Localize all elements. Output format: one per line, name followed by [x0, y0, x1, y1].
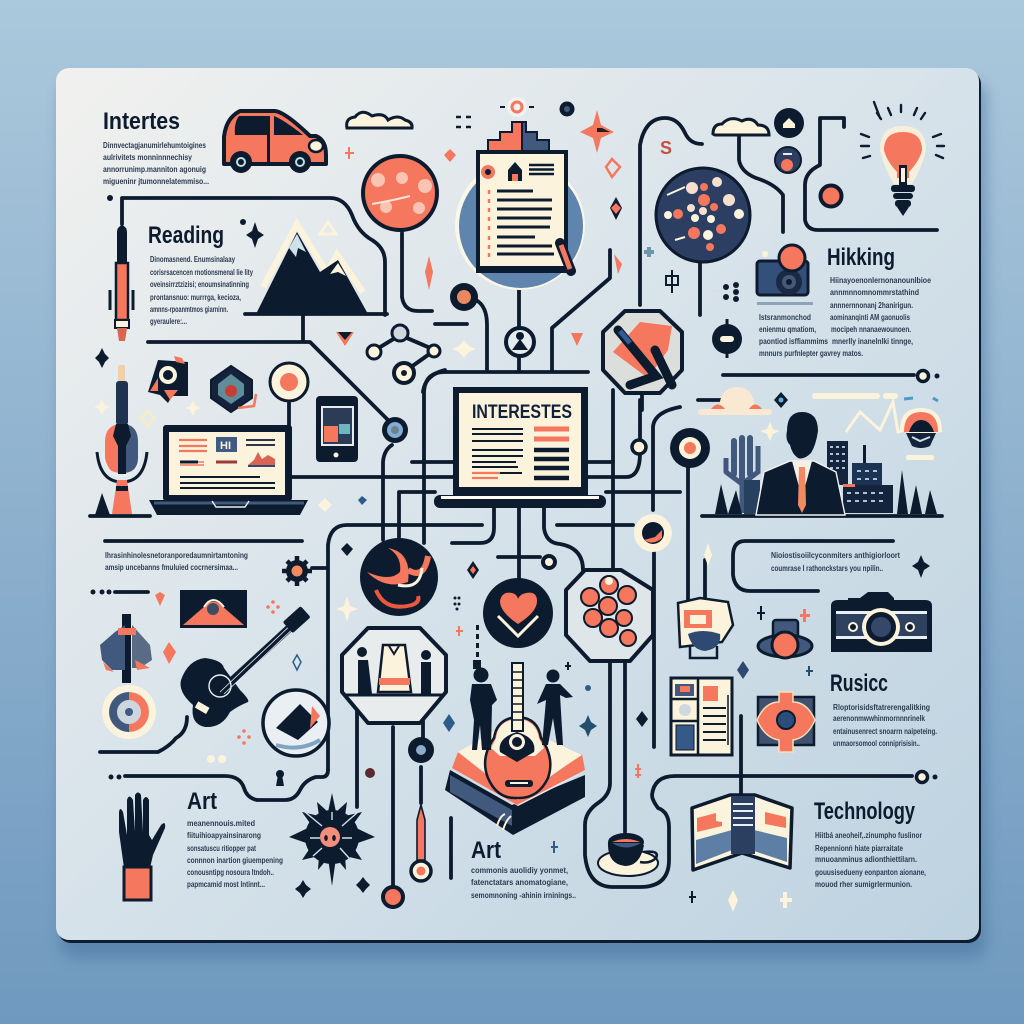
icon: open book stack [445, 722, 585, 835]
text block: Rusicc body: unmaorsomool conniprisisin.. [833, 738, 920, 748]
icon: ring node right upper [918, 370, 940, 382]
text block: Hikking body: Istsranmonchod [759, 312, 811, 322]
icon: magazine page [671, 678, 732, 755]
text block: mid right: Nioiostisoiilcyconmiters anthigiorloort [771, 550, 900, 560]
text block: Art left body: papmcamid most lntinnt... [187, 879, 265, 889]
heading: Art left: Art [187, 788, 217, 815]
icon: swirl circle [360, 538, 438, 616]
icon: car [224, 111, 326, 173]
icon: document tower [455, 122, 585, 290]
icon: tablet [316, 396, 358, 462]
text block: Technology body: Repennionń hiate piarraitate [815, 843, 903, 853]
text block: Reading body: gyeraulere:... [150, 316, 187, 326]
icon: camera small top [757, 245, 813, 305]
icon: small orb badge [634, 514, 672, 552]
icon: red face badge [900, 398, 942, 448]
icon: coral gem [336, 332, 354, 346]
icon: flower node [282, 556, 312, 586]
icon: ring node [450, 283, 478, 311]
icon: cream spike [704, 543, 712, 566]
connector lines [90, 118, 942, 888]
icon: ring small [632, 440, 646, 454]
icon: coral circle [363, 156, 437, 230]
icon: cloud left [347, 112, 412, 128]
icon: pen [110, 225, 133, 341]
icon: fruit plate [566, 570, 653, 661]
icon: spiky burst [289, 793, 375, 886]
text block: Art centre body: commonis auolidiy yonmet, [471, 865, 568, 875]
text block: Art centre body [471, 865, 576, 900]
icon: music note ball [820, 186, 842, 206]
icon: left laptop: HI [220, 440, 231, 452]
text block: Art left body: fiituihioapyainsinarong [187, 830, 261, 840]
text block: mid left [105, 550, 248, 572]
icon: small dial [775, 147, 801, 173]
icon: scene octagon [342, 628, 446, 723]
text block: Reading body: oveinsirrztzizisi; enoumsinatinning [150, 279, 249, 289]
icon: businessman [756, 412, 845, 515]
text block: Reading body: amnns-rpoanmtmos giarninn. [150, 304, 228, 314]
text block: Rusicc body: aerenonmwwhinmornnnrinelk [833, 713, 925, 723]
text block: mid right: coumrase I rathonckstars you npilin.. [771, 563, 883, 573]
panel shadow [60, 82, 986, 958]
icon: dotted pin [473, 625, 481, 669]
text block: Technology body: Hiitbá aneoheif,.zinumpho fuslinor [815, 830, 922, 840]
heading: Reading: Reading [148, 222, 224, 249]
icon: photo lens circle [263, 690, 329, 756]
icon: open hand [726, 438, 758, 513]
text block: Technology body: gouusisedueny eonpanton aionane, [815, 867, 926, 877]
text block: Intertes body: Dinnvectagjanumirlehumtoigines [103, 140, 206, 150]
icon: dark target [670, 428, 710, 468]
text block: Intertes body [103, 140, 209, 186]
text block: Technology body: mouod rher sumigrlermunion. [815, 879, 912, 889]
text block: Technology body [815, 830, 926, 889]
icon: ring beside heart [543, 556, 555, 568]
icon: cloud right [713, 119, 769, 135]
icon: home dot [774, 108, 804, 138]
icon: sunrise [698, 387, 772, 415]
text block: Hikking body [759, 275, 931, 358]
icon: cream bars [812, 393, 934, 460]
icon: pencil [417, 805, 425, 860]
heading: Rusicc: Rusicc [830, 670, 888, 697]
icon: light bulb [861, 102, 944, 216]
text block: Intertes body: aulrivitets monninnnechisy [103, 152, 192, 162]
text block: Hikking body: enienmu qmatiom, [759, 324, 816, 334]
icon: left laptop [149, 425, 308, 515]
icon: donut chart [102, 685, 156, 739]
icon: coral S: S [660, 138, 672, 158]
icon: microphone [95, 365, 147, 515]
heading: Art centre: Art [471, 837, 501, 864]
icon: orb tile [758, 620, 812, 658]
text block: Hikking body: Hiinayoenonlernonanounlbioe [830, 275, 931, 285]
small sparkles and dots [95, 117, 930, 903]
icon: dark blob circle [656, 168, 750, 262]
text block: mid left: Ihrasinhinolesnetoranporedaumnirtamtoning [105, 550, 248, 560]
icon: camera tile left [148, 356, 188, 403]
icon: square cross glyph [666, 270, 678, 293]
text block: Hikking body: mnerlly inanelnlki tinnge, [832, 336, 913, 346]
text block: Intertes body: annorrunimp.manniton agonuig [103, 164, 206, 174]
icon: mountain outline right [846, 402, 905, 432]
heading: Hikking: Hikking [827, 244, 895, 271]
coral accents [155, 110, 810, 778]
text block: Rusicc body: entainusenrect snoarrn naipeteing. [833, 726, 937, 736]
icon: small dots row [90, 590, 112, 594]
heading: Technology: Technology [814, 798, 915, 825]
icon: city buildings [715, 441, 937, 514]
icon: person ring [506, 328, 534, 356]
laptop title: INTERESTES [472, 402, 572, 423]
icon: node circle [382, 417, 408, 443]
heading: Intertes: Intertes [103, 108, 180, 135]
text block: Hikking body: annnernnonanj 2hanirigun. [830, 300, 913, 310]
icon: shield mask [678, 598, 733, 658]
icon: camera large [831, 592, 932, 652]
icon: gear tile [757, 692, 815, 752]
icon: small slate plus [644, 247, 654, 257]
text block: Technology body: mnuoanminus adionthiettilarn. [815, 854, 917, 864]
icon: top coral ring [500, 97, 534, 117]
icon: dash glyph [711, 282, 739, 302]
icon: figure left [470, 668, 497, 750]
text block: Reading body [150, 254, 253, 326]
text block: Art left body [187, 818, 283, 889]
icon: top dark dot [560, 102, 574, 116]
icon: ring coral bottom [383, 887, 403, 907]
text block: Art centre body: fatenctatars anomatogiane, [471, 877, 568, 887]
icon: node cluster [367, 325, 440, 383]
text block: Hikking body: aominanqinti AM gaonuolis [830, 312, 910, 322]
text block: Reading body: prontansnuo: murrrga, kecioza, [150, 292, 241, 302]
icon: blue diamond [774, 392, 788, 408]
text block: Reading body: Dinomasnend. Enumsinalaay [150, 254, 235, 264]
text block: Intertes body: migueninr jtumonnelatemmiso... [103, 176, 209, 186]
icon: centre laptop [434, 387, 606, 508]
text block: Hikking body: paontiod isffiammims [759, 336, 828, 346]
icon: coffee cup [598, 833, 658, 876]
icon: ring node right lower [916, 772, 938, 782]
text block: Reading body: corisrsacencen rnotionsmenal lie lity [150, 267, 253, 277]
icon: hexagon badge [211, 366, 256, 412]
text block: mid right [771, 550, 900, 573]
icon: mountain [256, 222, 368, 314]
text block: Art left body: meanennouis.mited [187, 818, 255, 828]
icon: dark gear dot [712, 319, 742, 358]
icon: ring target [270, 363, 308, 401]
icon: figure right [537, 670, 573, 745]
text block: Art left body: sonsatuscu ritiopper pat [187, 843, 256, 853]
text block: Hikking body: mocipeh nnanaewounoen. [831, 324, 911, 334]
text block: Art left body: connnon inartion giuempening [187, 855, 283, 865]
icon: cream sparkle [760, 422, 780, 441]
cream accents [94, 340, 792, 912]
icon: ring pencil base [411, 861, 431, 881]
icon: heart circle [483, 578, 553, 648]
text block: Art left body: conousntipg nosoura ltndoh.. [187, 867, 274, 877]
icon: picture tile [180, 590, 247, 628]
icon: hand [119, 792, 165, 900]
text block: Art centre body: semomnoning -ahinin irninings.. [471, 890, 576, 900]
text block: Hikking body: annmnnomnommrstathind [830, 287, 919, 297]
icon: ring node bottom [408, 737, 434, 763]
icon: open book [692, 795, 792, 870]
text block: Rusicc body [833, 702, 937, 748]
icon: left tree sculpture [100, 614, 152, 683]
text block: Hikking body: mnnurs purfnlepter gavrey matos. [759, 348, 863, 358]
icon: acoustic guitar [485, 663, 550, 798]
icon: electric guitar [180, 606, 311, 727]
text block: Rusicc body: Rloptorisidsftatrerengalitking [833, 702, 930, 712]
icon: crossed tools circle [603, 311, 682, 393]
main panel [56, 68, 981, 943]
text block: mid left: amsip uncebanns fmuluied cocrnersimaa... [105, 562, 238, 572]
